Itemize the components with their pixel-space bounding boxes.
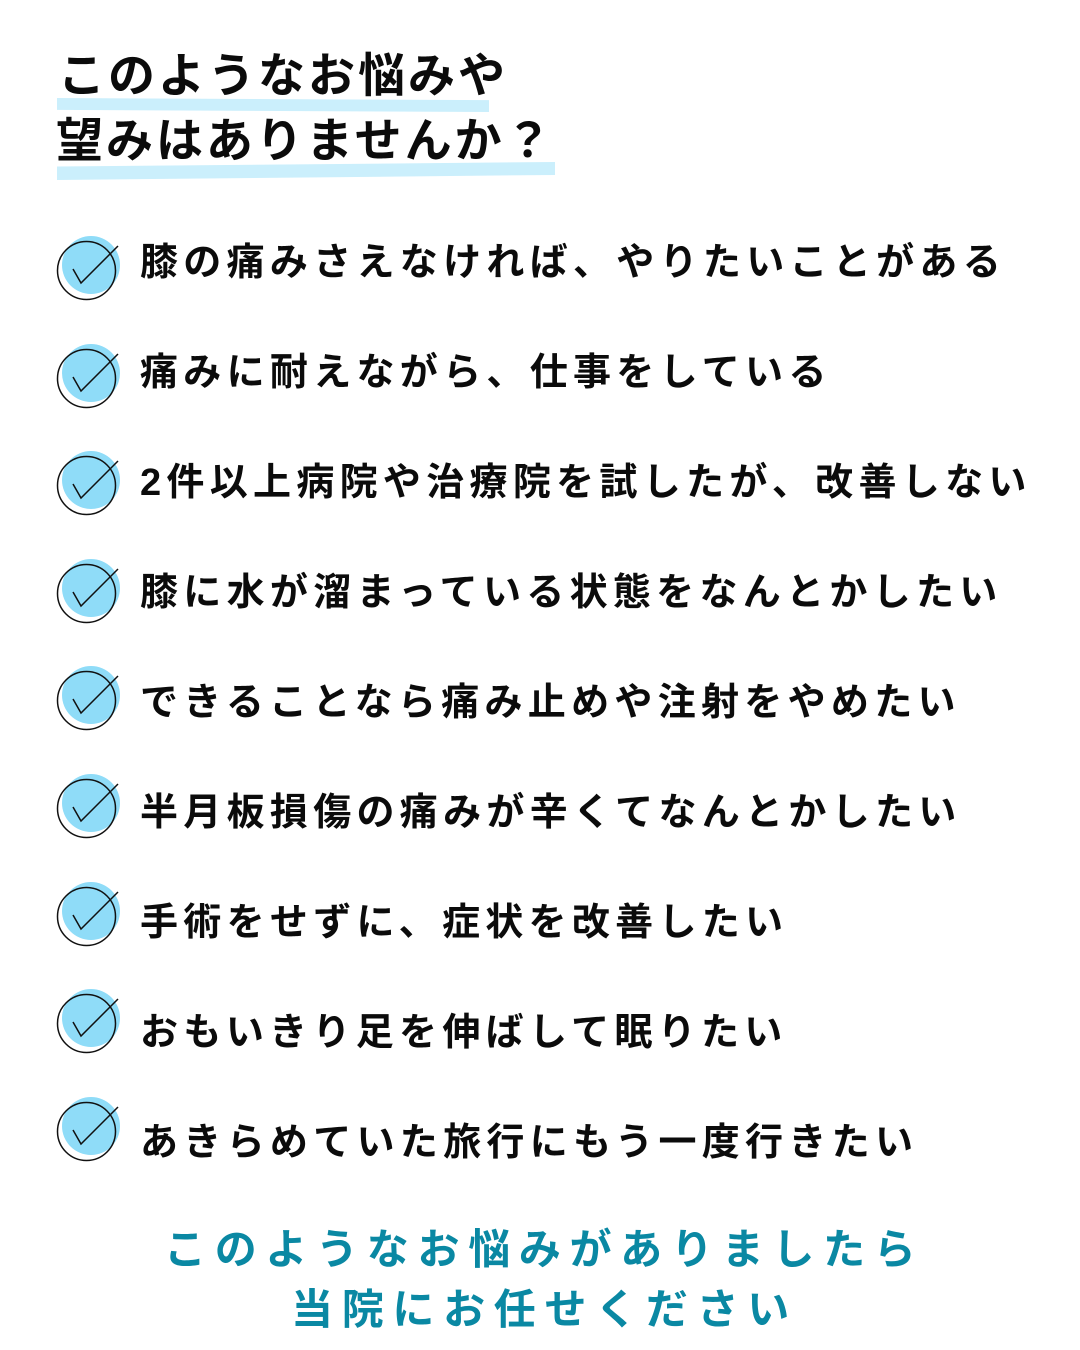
heading underline 1 [57, 98, 489, 112]
icon: check 4 [56, 559, 120, 624]
heading line 2: 望みはありませんか？ [56, 114, 555, 167]
heading underline 2 [57, 162, 555, 180]
text 6: 半月板損傷の痛みが辛くてなんとかしたい [140, 792, 962, 834]
item 9 [56, 1097, 918, 1164]
icon: check 2 [56, 344, 120, 408]
item 5 [56, 666, 961, 730]
closing line 1: このようなお悩みがありましたら [164, 1226, 925, 1273]
item 8 [56, 989, 788, 1054]
icon: check 3 [56, 451, 120, 516]
heading [56, 49, 555, 180]
item 6 [56, 774, 962, 838]
item 3 [56, 451, 1032, 516]
text 2: 痛みに耐えながら、仕事をしている [140, 352, 832, 394]
icon: check 6 [56, 774, 120, 838]
icon: check 1 [56, 236, 120, 300]
text 1: 膝の痛みさえなければ、やりたいことがある [140, 242, 1006, 284]
text 9: あきらめていた旅行にもう一度行きたい [140, 1122, 918, 1164]
icon: check 8 [56, 989, 120, 1054]
closing line 2: 当院にお任せください [291, 1286, 798, 1333]
item 2 [56, 344, 832, 408]
closing message [164, 1226, 925, 1333]
text 5: できることなら痛み止めや注射をやめたい [140, 682, 961, 724]
icon: check 7 [56, 882, 120, 946]
text 7: 手術をせずに、症状を改善したい [140, 902, 788, 944]
heading line 1: このようなお悩みや [58, 49, 508, 102]
item 4 [56, 559, 1003, 624]
text 8: おもいきり足を伸ばして眠りたい [140, 1012, 788, 1054]
checklist [56, 236, 1032, 1164]
item 1 [56, 236, 1006, 300]
item 7 [56, 882, 788, 946]
icon: check 9 [56, 1097, 120, 1162]
icon: check 5 [56, 666, 120, 730]
text 4: 膝に水が溜まっている状態をなんとかしたい [140, 572, 1003, 614]
text 3: 2件以上病院や治療院を試したが、改善しない [140, 462, 1032, 504]
